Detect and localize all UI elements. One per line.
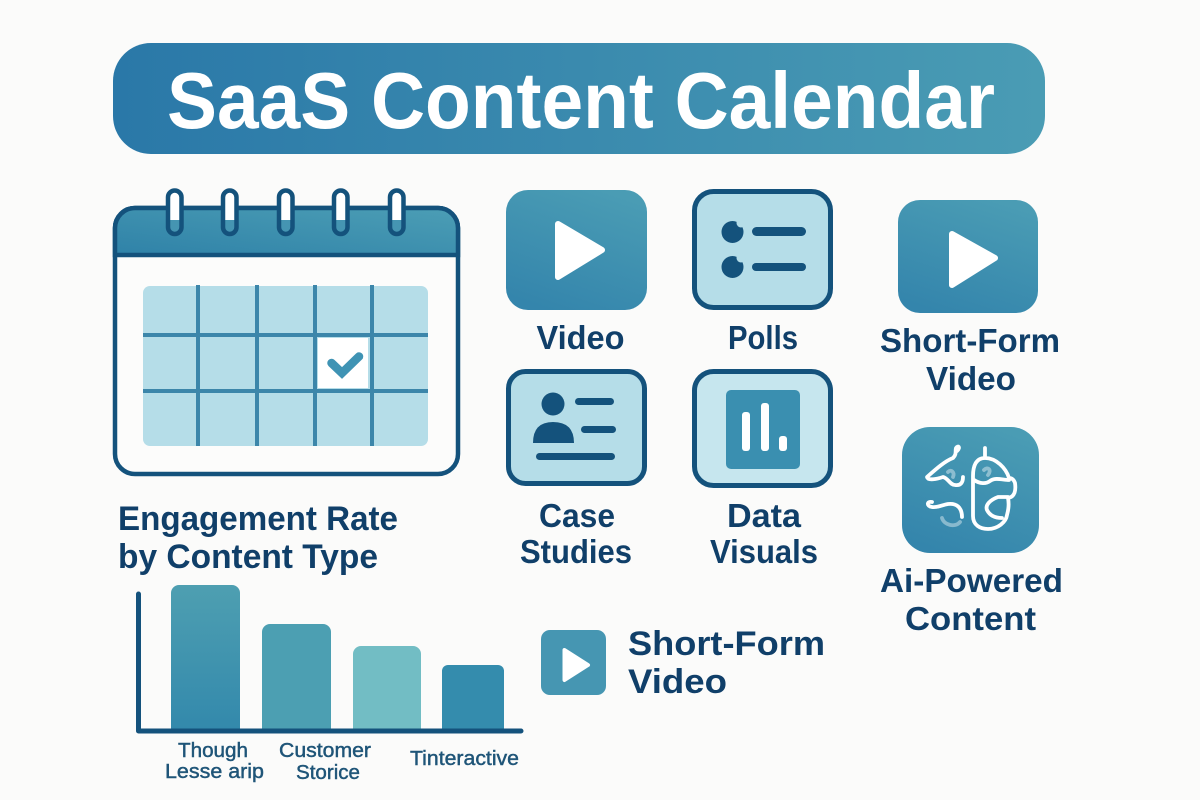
legend: short-form video: Short-Form (628, 625, 825, 663)
bars (171, 585, 504, 729)
card: case studies: Case (539, 497, 615, 534)
calendar binder rings (168, 190, 404, 234)
card: AI-powered content (880, 427, 1063, 637)
axis labels (165, 740, 519, 784)
icon: calendar (115, 190, 458, 474)
calendar grid (143, 285, 428, 446)
card: short-form video: Short-Form (880, 322, 1060, 359)
axis labels: Though (178, 740, 248, 762)
card: video: Video (536, 319, 624, 356)
card: data visuals: Data (727, 497, 802, 534)
card: AI-powered content: Ai-Powered (880, 562, 1063, 599)
card: data visuals: Visuals (710, 533, 818, 570)
chart heading (118, 500, 398, 576)
card: short-form video (880, 200, 1060, 397)
calendar check mark (332, 356, 359, 373)
card: AI-powered content: Content (905, 600, 1036, 637)
chart heading: Engagement Rate (118, 500, 398, 538)
chart axes (138, 594, 521, 731)
axis labels: Tinteractive (410, 748, 519, 770)
card: case studies: Studies (520, 533, 632, 570)
card: video (506, 190, 647, 356)
legend: short-form video (541, 625, 825, 701)
card: polls: Polls (728, 319, 798, 356)
card: polls (694, 192, 830, 356)
icon: AI brain (927, 447, 1015, 529)
axis labels: Storice (296, 762, 360, 784)
axis labels: Lesse arip (165, 761, 264, 783)
card: short-form video: Video (926, 360, 1016, 397)
title banner: SaaS Content Calendar (167, 56, 995, 145)
chart heading: by Content Type (118, 538, 378, 576)
card: case studies (508, 372, 644, 570)
legend: short-form video: Video (628, 663, 727, 701)
card: data visuals (694, 372, 830, 570)
axis labels: Customer (279, 740, 371, 762)
bar chart (138, 585, 521, 784)
